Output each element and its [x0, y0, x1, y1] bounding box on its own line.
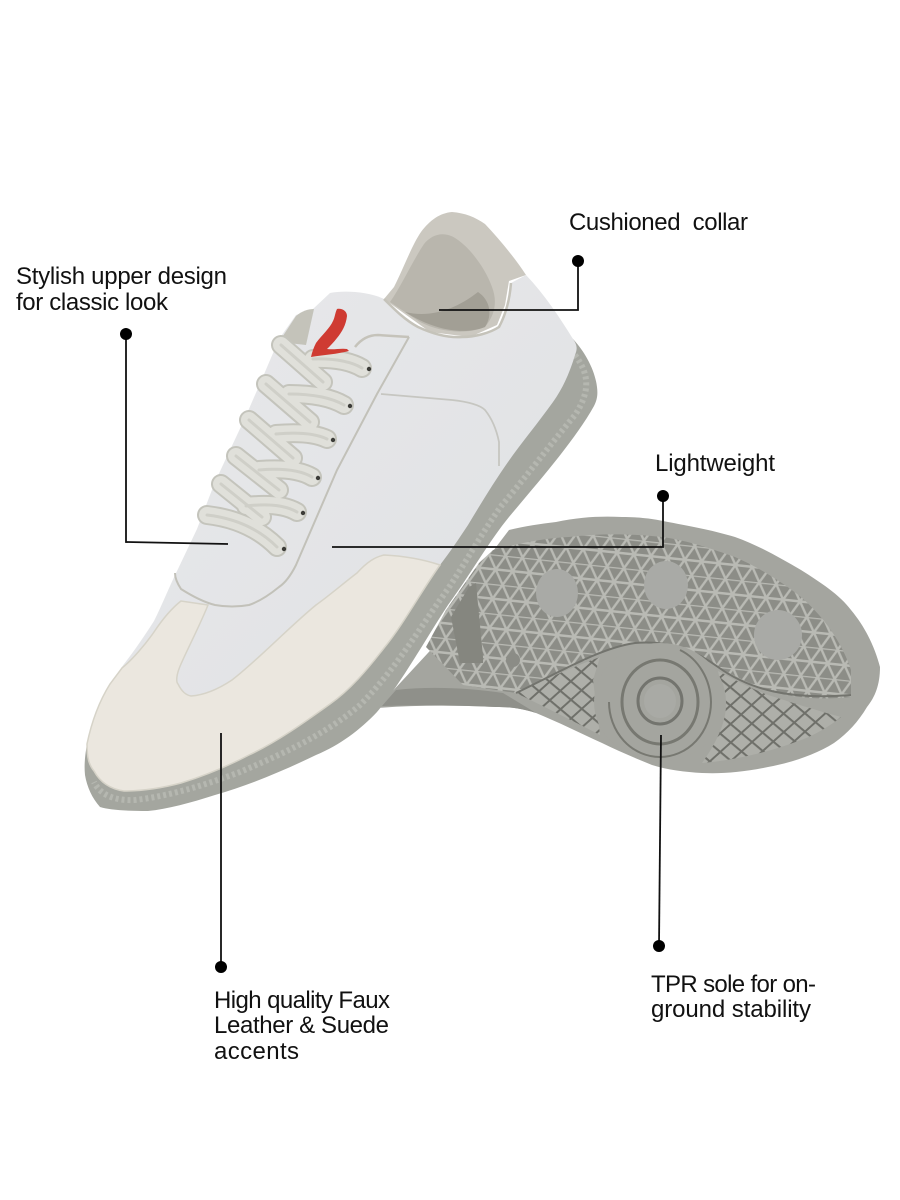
callout: faux leather: accents [214, 1038, 299, 1065]
arch bar [451, 583, 483, 663]
suede toe cap [87, 555, 440, 791]
callout: stylish upper: for classic look [16, 289, 169, 316]
leader line [126, 334, 228, 544]
sole of upper shoe [85, 320, 597, 811]
laces [207, 345, 362, 547]
tread: triangle pattern [426, 534, 851, 698]
collar outer [384, 212, 526, 337]
pivot circle [594, 643, 726, 761]
sole tooth band [94, 355, 586, 800]
callout: lightweight [332, 450, 775, 547]
tread: heel waffle grid [516, 657, 600, 735]
callout: stylish upper [16, 263, 228, 544]
callout: faux leather: Leather & Suede [214, 1012, 389, 1039]
callout: faux leather [214, 733, 390, 1065]
tread: forefoot waffle grid [702, 671, 841, 763]
eyelets [282, 367, 371, 551]
outsole rim [377, 517, 880, 773]
callout: TPR sole: TPR sole for on- [651, 971, 816, 998]
tongue edge [279, 309, 314, 345]
leader line [220, 733, 222, 967]
collar interior shadow [405, 292, 489, 331]
callout: stylish upper: Stylish upper design [16, 263, 227, 290]
sidewall shadow [382, 688, 536, 713]
S curve line [516, 642, 851, 696]
eyestay seam [175, 337, 409, 606]
callout: TPR sole [651, 735, 816, 1023]
collar rim [355, 283, 511, 347]
callout: TPR sole: ground stability [651, 996, 811, 1023]
leader line [439, 261, 578, 310]
callout: lightweight: Lightweight [655, 450, 775, 477]
callout: cushioned collar: Cushioned collar [569, 209, 748, 236]
leader line [659, 735, 661, 946]
tread dots [506, 561, 802, 667]
collar lining [390, 234, 495, 332]
lower shoe: sole view [377, 517, 880, 773]
leader line [332, 496, 663, 547]
upper body [87, 275, 577, 791]
upper shoe [85, 212, 597, 811]
tongue logo [311, 309, 349, 357]
callout: faux leather: High quality Faux [214, 987, 390, 1014]
side stitching [381, 394, 499, 466]
callout: cushioned collar [439, 209, 748, 310]
